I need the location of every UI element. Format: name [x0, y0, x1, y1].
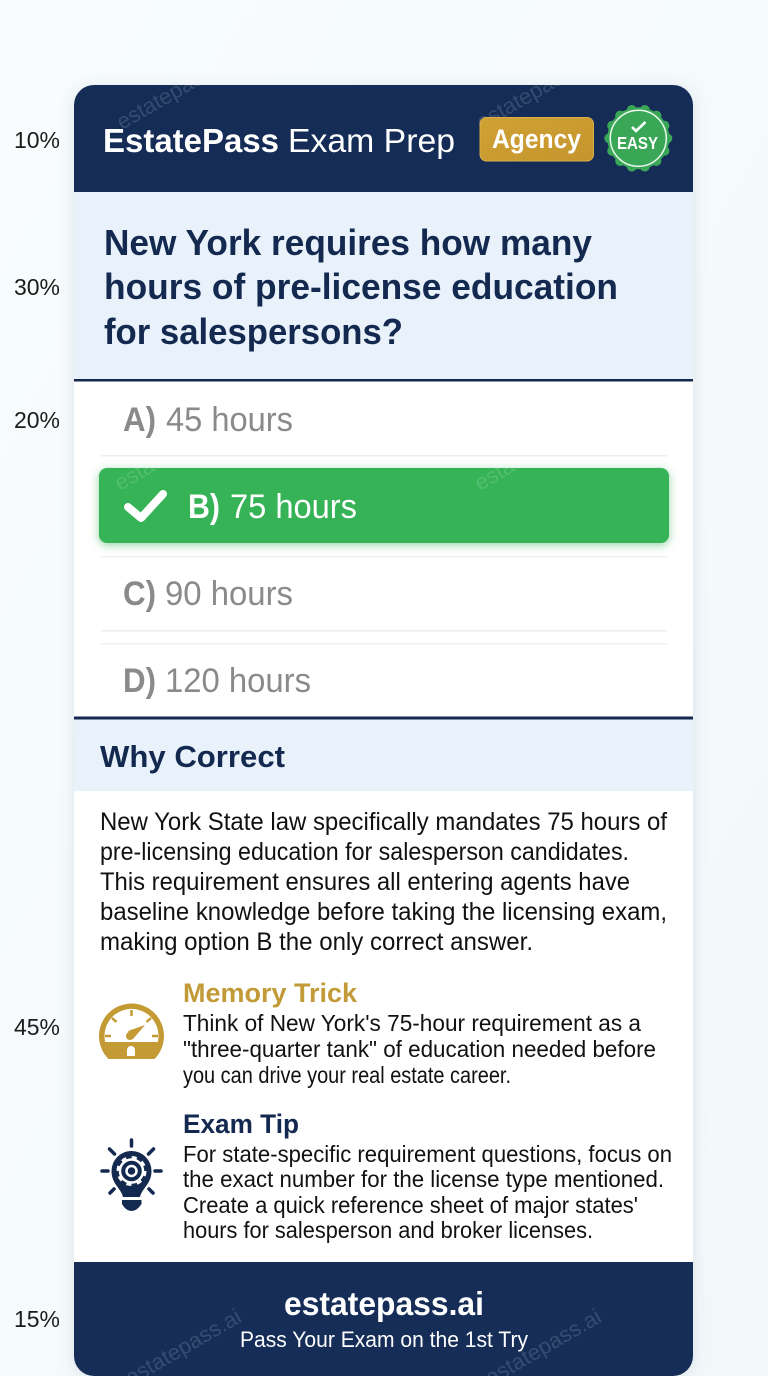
- memory trick text: Think of New York's 75-hour requirement as a: [183, 1010, 641, 1036]
- exam tip text: the exact number for the license type mentioned.: [183, 1166, 664, 1192]
- panel: answer options: [99, 401, 669, 700]
- panel: exam tip: [102, 1109, 672, 1243]
- panel: memory trick: Memory Trick: [183, 978, 358, 1008]
- panel: memory trick: [99, 978, 656, 1088]
- icon: lightbulb with gear: [102, 1140, 161, 1211]
- question text: New York requires how many: [104, 222, 592, 263]
- brand title: Exam Prep: [288, 122, 455, 159]
- footer tagline: Pass Your Exam on the 1st Try: [240, 1327, 528, 1352]
- exam tip text: For state-specific requirement questions, focus on: [183, 1141, 672, 1167]
- badge: EASY seal: [604, 105, 672, 172]
- option B: correct answer: 75 hours: [230, 488, 357, 526]
- panel: question: [74, 192, 693, 382]
- badge: EASY seal: EASY: [617, 133, 658, 153]
- footer site name: estatepass.ai: [284, 1285, 484, 1322]
- option A: [101, 401, 667, 456]
- explanation text: baseline knowledge before taking the licensing exam,: [100, 898, 667, 926]
- option B: correct answer: [92, 464, 676, 552]
- exam tip text: Create a quick reference sheet of major states': [183, 1192, 638, 1218]
- exam tip text: [183, 1141, 672, 1243]
- question text: for salespersons?: [104, 311, 403, 352]
- percentage labels: 10%: [14, 127, 60, 153]
- question text: hours of pre-license education: [104, 266, 618, 307]
- explanation text: making option B the only correct answer.: [100, 928, 533, 956]
- percentage labels: 20%: [14, 407, 60, 433]
- option D: [101, 643, 667, 700]
- option A: 45 hours: [166, 401, 293, 439]
- explanation text: This requirement ensures all entering agents have: [100, 868, 630, 896]
- panel: why correct heading: [74, 716, 693, 791]
- brand title: EstatePass: [103, 122, 279, 159]
- memory trick text: you can drive your real estate career.: [183, 1062, 511, 1088]
- option B: correct answer: estatepass.ai: [110, 409, 235, 495]
- explanation text: New York State law specifically mandates 75 hours of: [100, 808, 667, 836]
- brand title: [103, 122, 455, 159]
- percentage labels: [14, 127, 60, 1332]
- icon: gauge: [99, 1004, 164, 1059]
- exam tip text: hours for salesperson and broker licenses.: [183, 1217, 593, 1243]
- option C: 90 hours: [165, 575, 293, 613]
- memory trick text: "three-quarter tank" of education needed before: [183, 1036, 656, 1062]
- option B: correct answer: B): [188, 488, 220, 526]
- panel: footer: [74, 1262, 693, 1376]
- card: [74, 48, 693, 1376]
- panel: header: [74, 85, 693, 192]
- option A: A): [123, 401, 156, 439]
- option D: D): [123, 662, 156, 700]
- option B: correct answer: estatepass.ai: [470, 409, 595, 495]
- explanation text: [100, 808, 667, 956]
- badge: Agency: Agency: [492, 124, 581, 154]
- percentage labels: 45%: [14, 1014, 60, 1040]
- option D: 120 hours: [165, 662, 311, 700]
- question text: [104, 222, 618, 352]
- panel: header: estatepass.ai: [472, 48, 597, 134]
- badge: Agency: [480, 118, 594, 161]
- option C: [101, 556, 667, 632]
- icon: check mark: [128, 494, 163, 518]
- percentage labels: 30%: [14, 274, 60, 300]
- panel: why correct heading: Why Correct: [100, 739, 285, 774]
- explanation text: pre-licensing education for salesperson candidates.: [100, 838, 629, 866]
- option C: C): [123, 575, 156, 613]
- panel: exam tip: Exam Tip: [183, 1109, 299, 1139]
- memory trick text: [183, 1010, 656, 1088]
- panel: header: estatepass.ai: [112, 48, 237, 134]
- percentage labels: 15%: [14, 1306, 60, 1332]
